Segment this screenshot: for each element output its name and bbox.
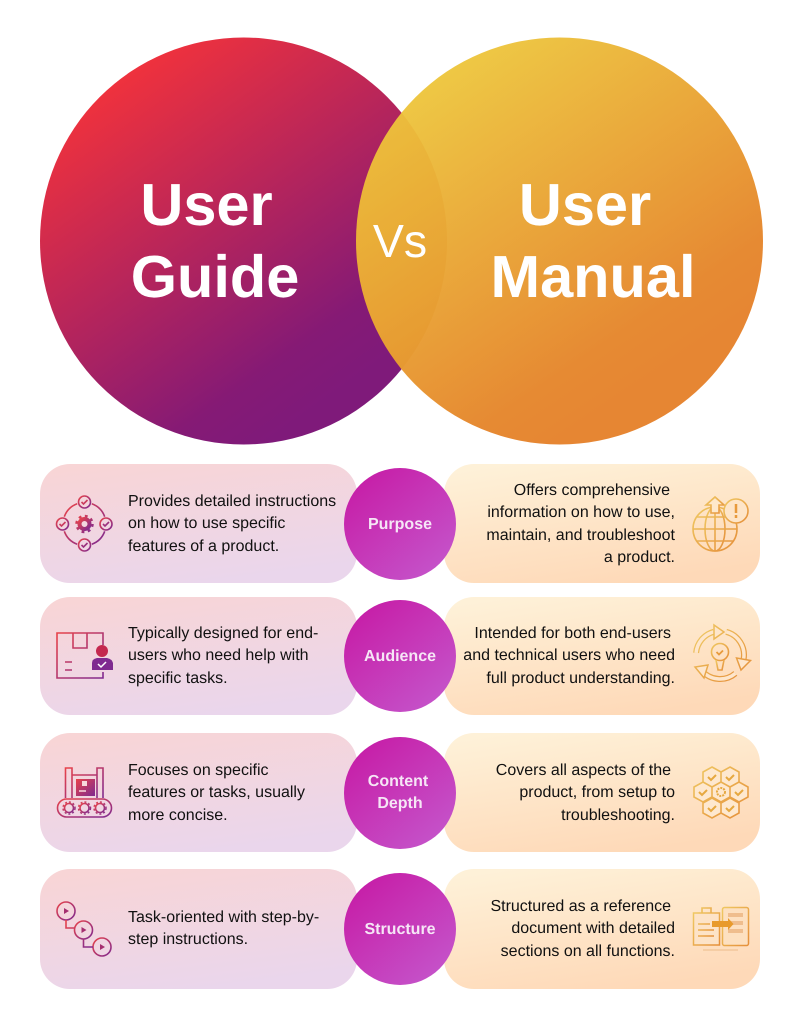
title: User Guide xyxy=(131,171,299,310)
panel: Structure guide xyxy=(40,869,357,989)
text: Provides detailed instructions xyxy=(128,493,336,510)
text: more concise. xyxy=(128,807,228,824)
text: Typically designed for end- xyxy=(128,625,318,642)
badge: Content Depth xyxy=(344,737,456,849)
badge: Audience: Audience xyxy=(364,648,436,665)
icon: gear with checks xyxy=(56,496,112,551)
badge: Audience xyxy=(344,600,456,712)
text: Structured as a reference xyxy=(490,898,671,915)
icon: step flow xyxy=(57,902,111,956)
text: sections on all functions. xyxy=(501,943,675,960)
text: product, from setup to xyxy=(519,784,675,801)
icon: globe with alert xyxy=(693,497,748,551)
badge: Purpose xyxy=(344,468,456,580)
text xyxy=(496,762,675,824)
panel: Purpose manual xyxy=(444,464,760,583)
panel: Audience manual xyxy=(444,597,760,715)
panel: Content Depth manual xyxy=(444,733,760,852)
text: specific tasks. xyxy=(128,670,228,687)
text: information on how to use, xyxy=(487,504,675,521)
panel: Purpose guide xyxy=(40,464,357,583)
panel: Content Depth guide xyxy=(40,733,357,852)
label: Vs: Vs xyxy=(373,215,427,267)
badge: Purpose: Purpose xyxy=(368,516,432,533)
title: User Manual: User xyxy=(519,171,651,238)
text xyxy=(128,762,305,824)
title: User Manual xyxy=(491,171,695,310)
icon: conveyor xyxy=(58,768,112,817)
text: Focuses on specific xyxy=(128,762,269,779)
text: document with detailed xyxy=(511,920,675,937)
icon: clipboard and tablet xyxy=(694,908,748,950)
icon: honeycomb xyxy=(694,767,748,818)
title: User Guide: User xyxy=(140,171,273,238)
text: on how to use specific xyxy=(128,515,285,532)
text: full product understanding. xyxy=(486,670,675,687)
text xyxy=(490,898,675,960)
text: a product. xyxy=(604,549,675,566)
text: features of a product. xyxy=(128,538,279,555)
text: Offers comprehensive xyxy=(514,482,670,499)
title: User Manual: Manual xyxy=(491,243,695,310)
badge: Structure: Structure xyxy=(364,921,436,938)
text xyxy=(486,482,676,566)
text xyxy=(128,625,318,687)
panel: Audience guide xyxy=(40,597,357,715)
text xyxy=(463,625,675,687)
text: Covers all aspects of the xyxy=(496,762,671,779)
text: and technical users who need xyxy=(463,647,675,664)
badge: Content Depth: Content xyxy=(368,773,429,790)
icon: bulb in cycle xyxy=(695,625,750,679)
text: Task-oriented with step-by- xyxy=(128,909,319,926)
panel: Structure manual xyxy=(444,869,760,989)
icon: box with user xyxy=(57,633,113,678)
circle: User Manual xyxy=(356,38,763,444)
text xyxy=(128,493,336,555)
circle: User Guide xyxy=(40,38,447,444)
badge: Content Depth: Depth xyxy=(377,795,423,812)
text: step instructions. xyxy=(128,931,248,948)
text: maintain, and troubleshoot xyxy=(486,527,676,544)
title: User Guide: Guide xyxy=(131,243,299,310)
text: Intended for both end-users xyxy=(474,625,671,642)
overlap lens xyxy=(356,114,435,228)
text: features or tasks, usually xyxy=(128,784,305,801)
text: users who need help with xyxy=(128,647,309,664)
text xyxy=(128,909,319,948)
text: troubleshooting. xyxy=(561,807,675,824)
badge: Structure xyxy=(344,873,456,985)
